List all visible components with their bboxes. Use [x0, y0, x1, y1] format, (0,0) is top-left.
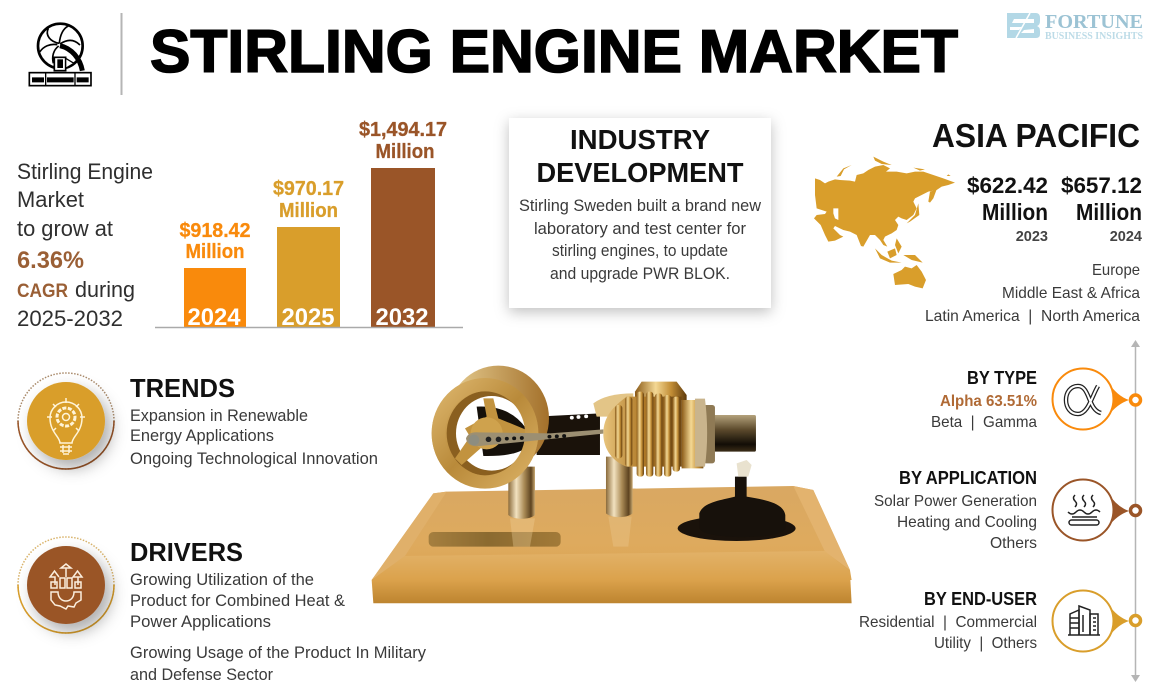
by end-user text: BY END-USER	[924, 589, 1037, 609]
by end-user text	[859, 589, 1037, 652]
growth summary text: 2025-2032	[17, 306, 123, 331]
by type text: Alpha 63.51%	[940, 393, 1037, 410]
by end-user marker	[1052, 590, 1140, 652]
drivers text: Growing Usage of the Product In Military	[130, 643, 426, 662]
brand logo: Fortune Business Insights	[1007, 11, 1143, 42]
by type text: Beta | Gamma	[931, 414, 1037, 431]
bar 2025: Million	[279, 200, 338, 222]
region heading: Asia Pacific: ASIA PACIFIC	[932, 117, 1140, 154]
brand logo: Fortune Business Insights: FORTUNE	[1045, 11, 1143, 33]
growth summary text: CAGR	[17, 281, 68, 302]
bar 2032: $1,494.17	[359, 119, 447, 141]
map: Asia Pacific	[814, 157, 955, 288]
drivers icon circle	[18, 537, 114, 633]
drivers text	[130, 537, 426, 684]
stat: 2023: 2023	[1016, 229, 1048, 245]
wooden base	[372, 486, 852, 603]
icon: alpha	[1066, 386, 1101, 414]
other regions list: Europe	[1092, 262, 1140, 279]
trends text: Ongoing Technological Innovation	[130, 449, 378, 468]
growth summary text: 6.36%	[17, 247, 84, 274]
panel: industry development: INDUSTRY	[570, 124, 710, 155]
cooling fins	[603, 382, 687, 477]
trends icon circle	[18, 373, 114, 469]
growth summary text: to grow at	[17, 216, 113, 241]
stat: 2023: $622.42	[967, 173, 1048, 198]
growth summary text: during	[75, 277, 135, 302]
bar 2024: $918.42	[180, 220, 250, 242]
stat: 2024: $657.12	[1061, 173, 1142, 198]
bar 2032	[359, 119, 447, 331]
segment axis arrow	[1131, 340, 1140, 682]
illustration: Stirling engine on wooden base	[372, 366, 852, 603]
stat: 2024: Million	[1076, 199, 1142, 225]
support posts	[508, 457, 633, 519]
drivers text: and Defense Sector	[130, 665, 273, 684]
stat: 2023	[967, 173, 1048, 245]
bar 2025: $970.17	[273, 178, 344, 200]
flywheel	[432, 366, 549, 488]
other regions list: Middle East & Africa	[1002, 285, 1140, 302]
by application text: Solar Power Generation	[874, 493, 1037, 510]
stat: 2024	[1061, 173, 1142, 245]
drivers text: DRIVERS	[130, 537, 243, 567]
panel: industry development	[509, 118, 771, 308]
trends text: Energy Applications	[130, 426, 274, 445]
bar chart: market size	[155, 119, 463, 331]
by application text	[874, 468, 1037, 552]
growth summary text	[17, 159, 153, 331]
cylinder tube and dark body	[537, 393, 756, 468]
icon: buildings	[1068, 606, 1100, 635]
connecting rod	[466, 416, 603, 446]
trends text: Expansion in Renewable	[130, 406, 308, 425]
other regions list: Latin America | North America	[925, 308, 1140, 325]
drivers text: Product for Combined Heat &	[130, 591, 346, 610]
by type text	[931, 368, 1037, 431]
by application text: Heating and Cooling	[897, 514, 1037, 531]
trends text	[130, 373, 378, 468]
trends text: TRENDS	[130, 373, 235, 403]
icon: heat over surface	[1068, 495, 1100, 525]
header logo icon: engine	[29, 24, 91, 86]
burner	[678, 460, 796, 541]
by application text: Others	[990, 535, 1037, 552]
other regions list	[925, 262, 1140, 325]
stat: 2024: 2024	[1110, 229, 1142, 245]
drivers text: Growing Utilization of the	[130, 570, 314, 589]
stat: 2023: Million	[982, 199, 1048, 225]
panel: industry development: DEVELOPMENT	[536, 157, 744, 188]
panel: industry development: stirling engines, to update	[552, 241, 728, 260]
bar 2024: 2024	[188, 304, 241, 331]
bar 2024	[180, 220, 250, 331]
panel: industry development: Stirling Sweden built a brand new	[519, 196, 762, 215]
growth summary text: Market	[17, 187, 84, 212]
by end-user text: Utility | Others	[934, 635, 1037, 652]
bar 2025: 2025	[282, 304, 334, 331]
brand logo: Fortune Business Insights: BUSINESS INSIGHTS	[1045, 31, 1143, 42]
drivers text: Power Applications	[130, 612, 271, 631]
by type text: BY TYPE	[967, 368, 1037, 388]
by application marker	[1052, 480, 1140, 540]
bar 2025	[273, 178, 344, 331]
bar 2032: Million	[376, 141, 434, 163]
growth summary text: Stirling Engine	[17, 159, 153, 184]
title: STIRLING ENGINE MARKET	[150, 18, 958, 85]
by type marker	[1052, 368, 1140, 430]
by end-user text: Residential | Commercial	[859, 614, 1037, 631]
bar 2024: Million	[186, 241, 244, 263]
icon: gear with arrows	[50, 564, 82, 609]
icon: light bulb with gear	[47, 398, 85, 454]
bar 2032: 2032	[376, 304, 428, 331]
panel: industry development: and upgrade PWR BLOK.	[550, 264, 730, 283]
by application text: BY APPLICATION	[899, 468, 1037, 488]
panel: industry development: laboratory and test center for	[534, 219, 746, 238]
